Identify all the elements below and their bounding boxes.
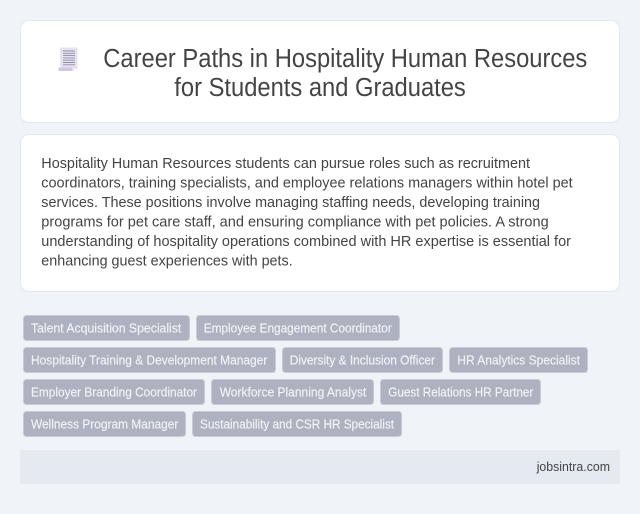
description text: programs for pet care staff, and ensuring compliance with pet policies. A strong [41,214,549,230]
tag: Guest Relations HR Partner: Guest Relations HR Partner [388,385,533,399]
career tags [24,316,588,436]
description text: understanding of hospitality operations combined with HR expertise is essential for [41,234,571,250]
tag: Employee Engagement Coordinator [196,316,400,340]
tag: Employee Engagement Coordinator: Employee Engagement Coordinator [204,321,392,335]
tag: Employer Branding Coordinator [24,380,204,404]
tag: Diversity & Inclusion Officer [282,348,442,372]
tag: Diversity & Inclusion Officer: Diversity & Inclusion Officer [290,353,435,367]
title: Career Paths in Hospitality Human Resources [103,45,587,73]
tag: Hospitality Training & Development Manager [24,348,276,372]
icon: document scroll [58,48,78,71]
description text [41,156,573,270]
tag: Sustainability and CSR HR Specialist: Sustainability and CSR HR Specialist [200,417,394,431]
footer bar [20,450,620,484]
tag: Guest Relations HR Partner [380,380,540,404]
footer source text: jobsintra.com [536,460,610,474]
description text: services. These positions involve managing staffing needs, developing training [41,195,540,211]
title: for Students and Graduates [174,74,466,102]
tag: Employer Branding Coordinator: Employer Branding Coordinator [31,385,197,399]
description text: enhancing guest experiences with pets. [41,254,293,270]
description text: coordinators, training specialists, and employee relations managers within hotel pet [41,176,573,192]
title [103,45,587,102]
description panel [20,134,620,292]
tag: Wellness Program Manager: Wellness Program Manager [31,417,178,431]
tag: Workforce Planning Analyst: Workforce Planning Analyst [220,385,367,399]
tag: Sustainability and CSR HR Specialist [192,412,402,436]
tag: HR Analytics Specialist [450,348,588,372]
description text: Hospitality Human Resources students can pursue roles such as recruitment [41,156,530,172]
header panel [20,20,620,122]
tag: Talent Acquisition Specialist: Talent Acquisition Specialist [31,321,182,335]
tag: Hospitality Training & Development Manager: Hospitality Training & Development Manager [31,353,267,367]
tag: Wellness Program Manager [24,412,186,436]
tag: Workforce Planning Analyst [212,380,374,404]
tag: Talent Acquisition Specialist [24,316,190,340]
tag: HR Analytics Specialist: HR Analytics Specialist [457,353,581,367]
